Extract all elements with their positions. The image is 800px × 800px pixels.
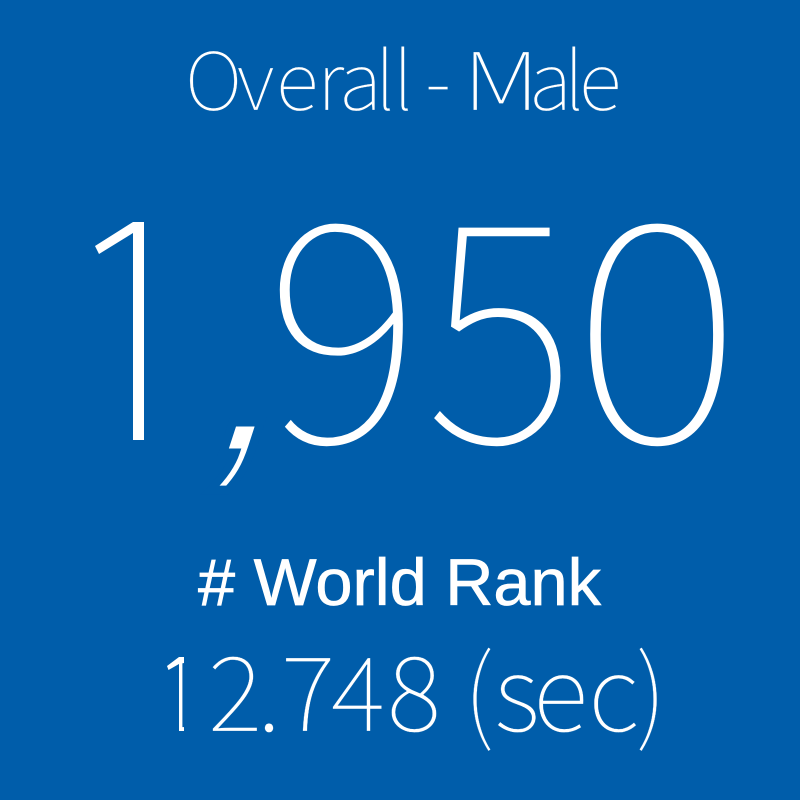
big rank number: 1 bbox=[52, 81, 214, 530]
time value: 1 bbox=[151, 610, 205, 761]
rank label: # World Rank bbox=[198, 545, 602, 619]
time value: 2.748 (sec) bbox=[208, 610, 667, 761]
big rank number: 0 bbox=[571, 87, 743, 532]
title bbox=[185, 18, 621, 134]
big rank number: 5 bbox=[425, 88, 577, 532]
title: ale bbox=[529, 18, 621, 134]
big rank number: , bbox=[176, 192, 361, 515]
title: Overall - bbox=[185, 18, 451, 134]
title: M bbox=[462, 18, 540, 134]
panel: world rank card bbox=[95, 46, 724, 751]
big rank number bbox=[95, 222, 724, 486]
big rank number: 9 bbox=[265, 86, 421, 532]
time value bbox=[167, 648, 657, 751]
